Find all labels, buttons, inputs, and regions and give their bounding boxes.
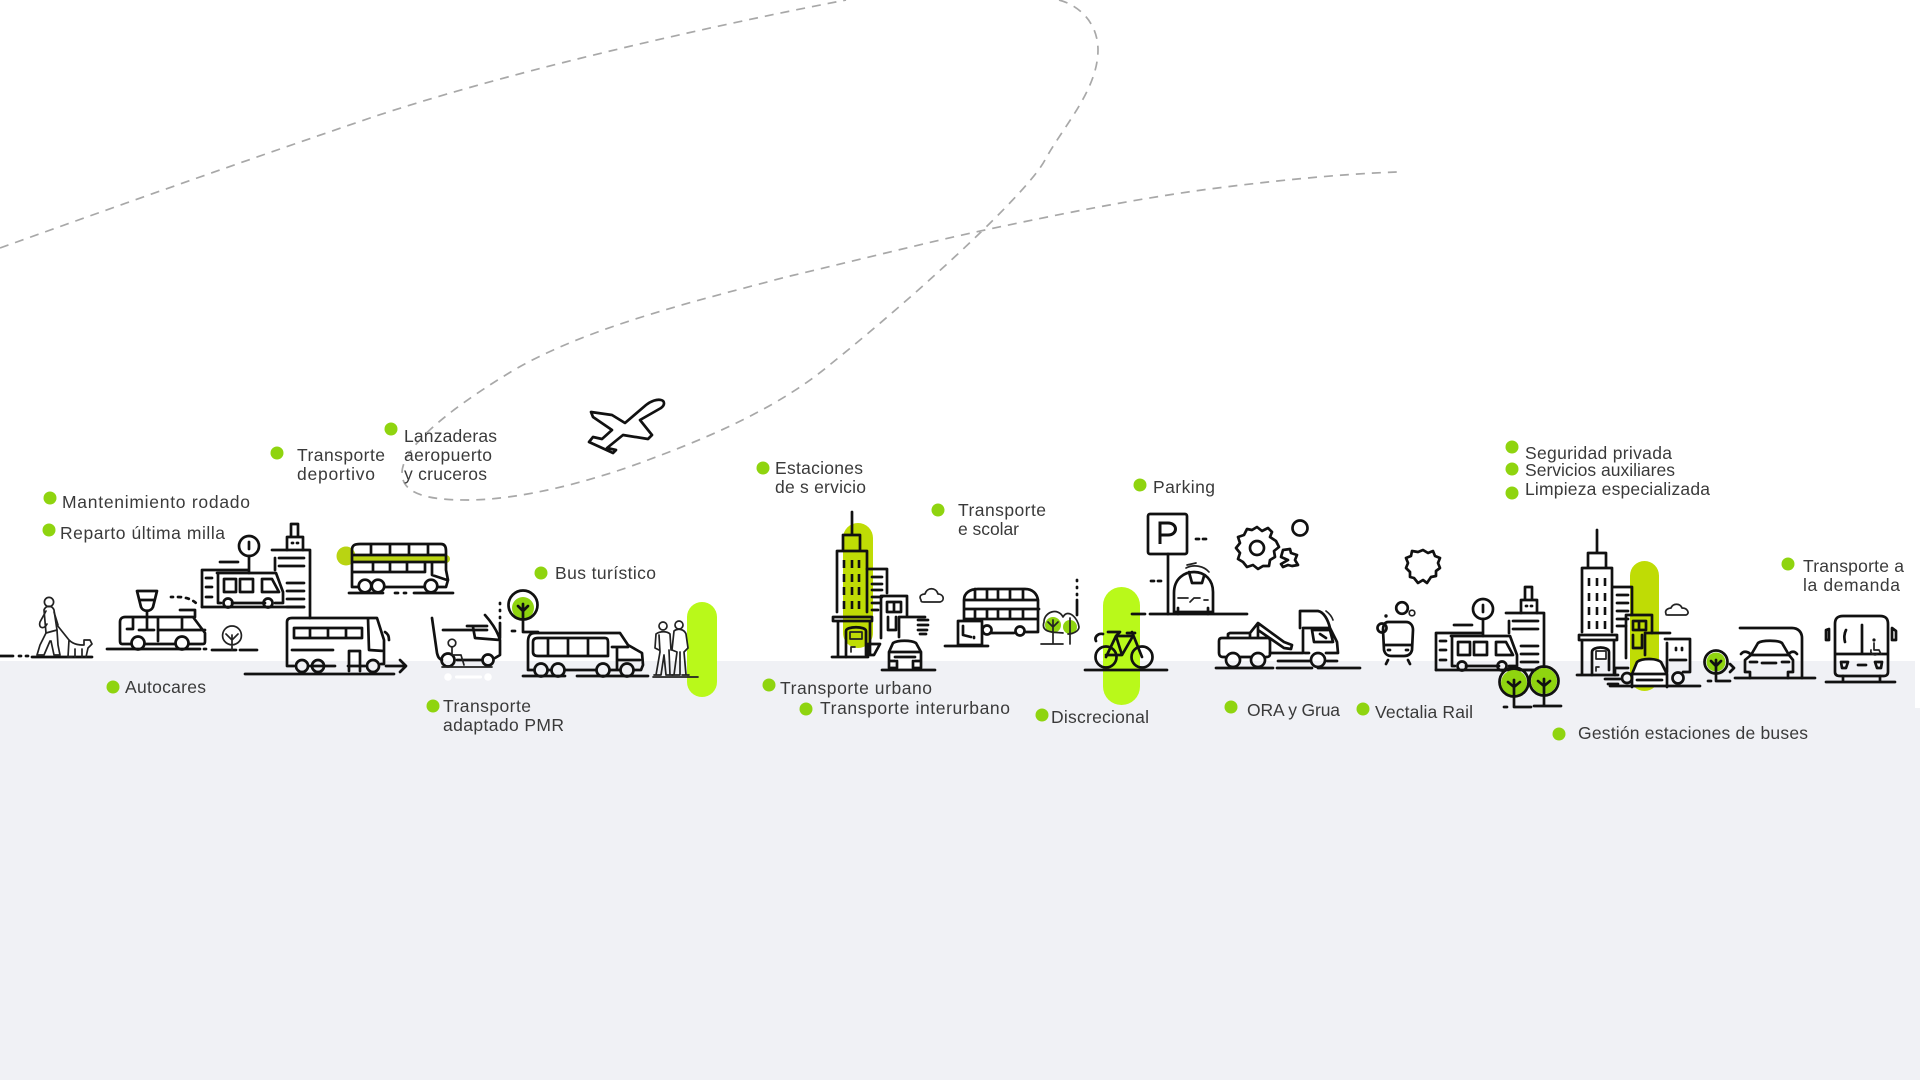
label: Transporte deportivo: Transporte [297, 445, 385, 465]
scene: bicycle with green pill [1085, 587, 1167, 705]
label: Mantenimiento rodado: Mantenimiento rodado [62, 492, 250, 512]
scene: car under shelter [1735, 628, 1815, 678]
label: Seguridad privada: Seguridad privada [1525, 443, 1672, 463]
label: Transporte adaptado PMR [426, 696, 564, 735]
label: Limpieza especializada: Limpieza especializada [1525, 479, 1710, 499]
label: Estaciones de servicio [756, 458, 866, 497]
scene: autocar with stop [107, 591, 257, 650]
scene: large coach with arrow [245, 618, 406, 674]
label: Transporte escolar: Transporte [958, 500, 1046, 520]
label: Transporte a la demanda: la demanda [1803, 575, 1900, 595]
label: Transporte deportivo [270, 445, 385, 484]
label: Reparto última milla: Reparto última milla [60, 523, 225, 543]
label: Estaciones de servicio: de s ervicio [775, 477, 866, 497]
icon: pair of green trees [1500, 666, 1561, 707]
label: ORA y Grua: ORA y Grua [1247, 700, 1340, 720]
label: Transporte a la demanda [1782, 556, 1904, 595]
label: Transporte adaptado PMR: adaptado PMR [443, 715, 564, 735]
scene: double-decker bus with green stripe [336, 544, 453, 593]
scene: city with green tower [832, 512, 943, 670]
label: Lanzaderas aeropuerto y cruceros [384, 422, 497, 484]
label: Parking: Parking [1153, 477, 1215, 497]
ground band [0, 661, 1920, 1080]
label: Transporte deportivo: deportivo [297, 464, 375, 484]
icon: gears [1236, 520, 1308, 569]
label: Lanzaderas aeropuerto y cruceros: aeropuerto [404, 445, 492, 465]
scene: second city [1577, 530, 1700, 691]
label: Discrecional: Discrecional [1051, 707, 1149, 727]
scene: walker with dog [0, 597, 92, 657]
icon: rail train with gear [1378, 550, 1440, 664]
label: Transporte interurbano: Transporte interurbano [820, 698, 1010, 718]
label: Lanzaderas aeropuerto y cruceros: y cruceros [404, 464, 487, 484]
label: Transporte escolar: e scolar [958, 519, 1019, 539]
icon: small green tree [1704, 650, 1734, 681]
scene: urban stop with bus and tower [202, 524, 310, 618]
scene: tow truck [1216, 611, 1360, 668]
label: Vectalia Rail: Vectalia Rail [1375, 702, 1473, 722]
icon: airplane [589, 400, 664, 453]
label: Transporte urbano: Transporte urbano [780, 678, 932, 698]
scene: green tree and tourist bus [508, 590, 648, 676]
label: Transporte escolar [932, 500, 1046, 539]
scene: school double-decker [945, 580, 1079, 646]
label: Servicios auxiliares: Servicios auxiliares [1525, 460, 1675, 480]
scene: accessible bus front [1826, 616, 1896, 682]
dashed flight route [0, 0, 1397, 500]
label: Autocares: Autocares [125, 677, 206, 697]
label: Gestión estaciones de buses: Gestión estaciones de buses [1578, 723, 1808, 743]
label: Estaciones de servicio: Estaciones [775, 458, 863, 478]
scene: pedestrians and green pill [653, 602, 717, 697]
scene: parking sign and car [1132, 514, 1247, 614]
scene: second urban stop [1436, 587, 1544, 681]
label: Bus turístico: Bus turístico [555, 563, 656, 583]
label: Transporte adaptado PMR: Transporte [443, 696, 531, 716]
scene: adapted PMR van with wheelchair [432, 603, 515, 681]
label: Lanzaderas aeropuerto y cruceros: Lanzaderas [404, 426, 497, 446]
label: Transporte a la demanda: Transporte a [1803, 556, 1904, 576]
